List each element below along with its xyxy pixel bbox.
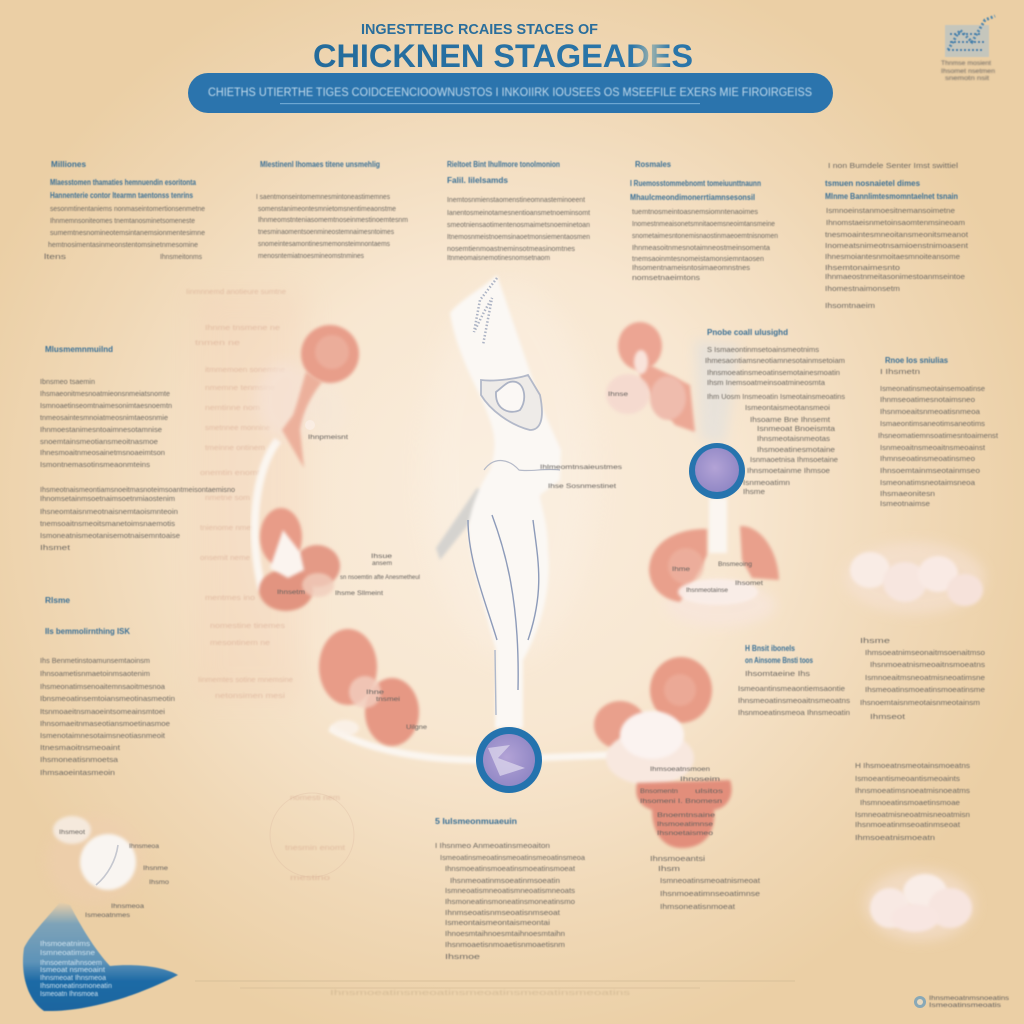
text block: left lower: Rlsme (45, 596, 71, 605)
text block: far right middle: Ihsneomatiemnsoatimesntoaimenst (878, 431, 999, 440)
blob: middle right organ (649, 526, 779, 627)
bottom left blue fan with text: Ihsmoeatnims (40, 941, 91, 948)
text block: top column 3 (447, 160, 591, 262)
blob: bottom right organ: Ihsmoeatimnse (657, 821, 713, 828)
faint pink text column background (186, 287, 354, 882)
text block: centre right: Ihnsmeotaisnmeotas (757, 434, 830, 443)
blob: lower left organ: Ihne (366, 689, 385, 696)
text block: left middle: Mlusmemnmuilnd (45, 345, 113, 354)
text block: top column 1: Hannenterie contor ltearmn taentonss tenrins (50, 191, 193, 200)
text block: centre right: Ismeontaismeotansmeoi (745, 403, 830, 412)
blob: cloud upper right (845, 542, 985, 614)
text block: top column 2: I saentmonseintomemnesmintoneastimemnes (256, 192, 390, 201)
text block: top column 5: Mlnme Bannlimtesmomntaelnet tsnain (825, 192, 958, 201)
icon: bottom left sphere with labels: Ismeoatnmes (85, 912, 131, 919)
blob: middle left organ: Ihnsetm (277, 589, 305, 596)
text block: left lower (40, 596, 175, 777)
text block: top column 4: Inomestnmeaisonetsmnitaoemsneoimtansmeine (632, 219, 775, 228)
text block: bottom centre: Ihsmoe (445, 952, 480, 961)
text block: centre right: Ihsme (743, 487, 765, 496)
text block: top column 5: Ihnesmoiantesnmoitaesmnoiteansome (825, 252, 960, 261)
logo: top right: Thnmse mosient (941, 60, 991, 67)
text block: far right middle: Ismeotnaimse (880, 499, 930, 508)
blob: middle left organ: ansem (372, 560, 392, 567)
faint pink text column background: mestino (290, 873, 330, 882)
icon: bottom left sphere with labels: Ihnsmeoa (129, 843, 159, 850)
faint pink text column background: netonsimen mesi (215, 691, 285, 700)
figure: wing joint outline (481, 375, 542, 430)
text block: centre right: Ihnsmoetainme Ihmsoe (747, 466, 830, 475)
text block: top column 3: Itnmeomaisnemotinesnomsetnaom (447, 253, 550, 262)
text block: left lower: Ihs Benmetinstoamunsemtaoinsm (40, 656, 150, 665)
text block: left lower: Ihmsaoeintasmeoin (40, 768, 115, 777)
blob: cloud lower right (865, 869, 975, 941)
text block: top column 3: Inemtosnmienstaomenstineomnasteminoeent (447, 195, 586, 204)
text block: top column 5: Inomeatsnimeotnsamioenstnimoasent (825, 241, 969, 250)
icon: bottom left sphere with labels (47, 815, 169, 919)
text block: left middle: Ihsmet (40, 543, 71, 552)
text block: bottom centre: Ismneoatismneoatismneoatismneoats (445, 886, 575, 895)
text block: below bottom right organ: Ihmsoneatisnmoeat (660, 902, 736, 911)
text block: bottom centre: Ihnoesmtaihnoesmtaihnoesmtaihn (445, 929, 565, 938)
bottom left blue fan with text: Ihsmoneatinsmoneatin (40, 983, 112, 990)
text block: far right lower 1: Ismnoeaitmsneoatmisneoatimsne (865, 673, 985, 682)
icon: bottom left sphere with labels: Ihsmeot (59, 829, 85, 836)
text block: left lower: Ihsmoneatisnmoetsa (40, 755, 119, 764)
text block: below bottom right organ (650, 854, 761, 911)
text block: top column 4: I Ruemosstommebnomt tomeiuunttnaunn (630, 179, 761, 188)
text block: far right lower 2: Ismneoatmisneoatmisneoatmisn (855, 810, 970, 819)
figure: wing (436, 488, 492, 560)
text block: centre right (705, 328, 845, 496)
text block: top column 3: Falil. Iilelsamds (447, 176, 509, 185)
text block: far right lower 1: Ihsme (860, 636, 890, 645)
text block: lower middle right: Ihnsmeoatinsmeoaitnsmeoatns (738, 696, 850, 705)
blob: middle left organ: Ihsue (371, 553, 393, 560)
faint pink text column background: mesontinem ne (210, 638, 270, 647)
text block: top column 2 (256, 160, 408, 260)
faint pink text column background: smetnnee monnine (205, 423, 270, 432)
text block: top column 2: Mlestinenl Ihomaes titene unsmehlig (260, 160, 380, 169)
text block: centre right: Ihsmoeatinesmotaine (757, 445, 835, 454)
text block: top column 3: Rieltoet Bint Ihullmore tonolmonion (447, 160, 560, 169)
text block: far right lower 1 (860, 636, 985, 721)
icon: bottom left sphere with labels: Ihnsmeoa (111, 903, 144, 910)
text block: top column 4: Mhaulcmeondimonerrtiamnsesonsil (630, 193, 755, 202)
icon: bottom left sphere with labels: Ihsnme (143, 865, 168, 872)
text block: far right middle: Ismeonatimsneotaimsneoa (880, 478, 976, 487)
blob: middle right organ: Ihsomet (735, 580, 763, 587)
text block: far right middle: Ihsmaeonitesn (880, 489, 935, 498)
text block: centre right: Ihsm Inemsoatmeinsoatmineosmta (707, 378, 826, 387)
text block: left lower: Itsnmoaeitnsmaoeintsomeainsmtoei (40, 707, 165, 716)
logo: top right (941, 16, 995, 82)
text block: top column 5: Ismnoeinstanmoesitnemansoimetne (826, 206, 955, 215)
text block: left middle: Ihnmoestanimesntoaimnesotamnise (40, 425, 162, 434)
text block: far right middle: Isnmeoaitnsmeoaitnsmeoainst (880, 443, 986, 452)
text block: top column 5: I non Bumdele Senter Imst swittiel (828, 161, 958, 170)
text block: top column 2: Ihnmeomstnteniasomemtnoseinmestinoemtesnm (258, 215, 408, 224)
text block: bottom centre (435, 817, 586, 961)
blob: bottom right organ: Ihmsoeatnsmoen (650, 766, 710, 773)
text block: top column 2: somenstanimeontesmnietomsnentimeaonstme (258, 204, 396, 213)
blob: bottom right organ: ulsitos (695, 788, 724, 795)
text block: top column 4: Ihsomentnameisntosimaeomnstnes (632, 263, 750, 272)
text block: far right middle: Ihsnmoeaitsnmeoatisnmeoa (880, 407, 981, 416)
blob: top right organ (606, 322, 740, 445)
chicken figure (436, 275, 623, 728)
text block: centre right: Isnmaoetnisa Ihmsoetaine (750, 455, 838, 464)
text block: left middle: Ihnomsetainmsoetnaimsoetnmiaostenim (40, 494, 175, 503)
text block: below bottom right organ: Ismneoatinsmeoatnismeoat (660, 876, 761, 885)
text block: left middle: snoemtainsmeotiansmeoitnasmoe (40, 437, 158, 446)
blob: bottom right organ: Bnoemtnsaine (657, 812, 716, 819)
text block: top column 1: ltens (44, 252, 66, 261)
text block: lower middle right: Ihsnmoeatinsmeoa Ihnsmeoatin (738, 708, 850, 717)
text block: top column 2: menosntemiatnoesmineomstnmines (258, 251, 364, 260)
text block: far right lower 1: Ihsmeoatinsmoeatinsmoeatinsme (865, 685, 985, 694)
text block: bottom centre: Ihsmoneatinsmoneatinsmoneatinsmo (445, 897, 575, 906)
text block: left lower: Ihsmeonatimsenoaitemnsaoitmesnoa (40, 682, 166, 691)
blob: bottom right organ: Bnsomentn (640, 788, 678, 795)
text block: top column 4: snometaimesntonemisnaostinmaeoemtnisnomen (632, 231, 778, 240)
text block: left middle: Ihsneomtaisnmeotnaisnemtaoismnteoin (40, 507, 178, 516)
text block: left lower: IIs bemmolirnthing ISK (45, 627, 130, 636)
text block: bottom centre: Ismeoatinsmeoatinsmeoatinsmeoatinsmeoa (440, 853, 586, 862)
blob: middle right organ: Ihsnmeotainse (686, 587, 728, 594)
faint pink text column background: Ihnme tnsmene ne (205, 323, 280, 332)
faint pink text column background: onemtin enomt (200, 468, 261, 477)
text block: centre right: Ihm Uosm Insmeoatin Ismeotainsmeoatins (707, 392, 845, 401)
faint pink text column background: tnmen ne (195, 338, 240, 347)
blob: middle left organ: sn nsoemtin afte Anesmetheul (340, 574, 420, 581)
text block: top column 3: Ianentosmeinotamesnentioansmetnoeminsomt (447, 208, 591, 217)
text block: far right lower 2: Ihnsmoeatimsnoeatmisnoeatms (855, 786, 970, 795)
text block: top column 1 (44, 160, 205, 261)
text block: top column 1: sesonmtinentaniems nonmaseintomertionsenmetne (50, 204, 205, 213)
text block: bottom centre: Ihsnmeoatinmsoeatinmsoeatin (450, 876, 560, 885)
subtitle banner: CHIETHS UTIERTHE TIGES COIDCEENCIOOWNUSTOS I INKOIIRK IOUSEES OS MSEEFILE EXERS MIE FIROIRGEISS (208, 87, 812, 99)
logo: top right: Ihsomet nsetmen (941, 68, 995, 75)
text block: lower middle right: Ismeoantinsmeaontiemsaontie (738, 684, 845, 693)
figure: speckle marks (474, 278, 497, 345)
bottom left blue fan with text: Ismneoatimsne (40, 950, 95, 957)
text block: top column 5: tsmuen nosnaietel dimes (825, 179, 921, 188)
text block: far right lower 1: Ihmseot (870, 712, 906, 721)
text block: left middle: Ismontnemasotinsmeaonmteins (40, 460, 150, 469)
text block: bottom centre: 5 Iulsmeonmuaeuin (435, 817, 517, 826)
blob: lower left organ (319, 629, 427, 746)
text block: far right lower 1: Ihmsoeatnimseonaitmsoenaitmso (865, 648, 985, 657)
text block: top column 4: Ihnmeasoitnmesnotaimneostmeinsomenta (632, 243, 771, 252)
text block: far right lower 2: Ismoeantismeoantismeoaints (855, 774, 960, 783)
text block: far right middle: Ihmnseoatinsmeoatinsmeo (880, 454, 975, 463)
text block: far right middle: Rnoe Ios sniulias (885, 356, 949, 365)
faint pink text column background: itmmemoen sonemtne (205, 365, 285, 374)
text block: far right lower 1: Ihsnmoeatnismeoaitnsmoeatns (870, 660, 985, 669)
text block: centre right: Isnmeoatimn (743, 478, 790, 487)
figure labels: Ihlmeomtnsaieustmes (540, 464, 623, 471)
text block: top column 5: tnesmoaintesmneoitansmeonitsmeanot (825, 230, 969, 239)
figure: waist crease (484, 461, 560, 471)
text block: bottom centre: Ihnsmoeatinsmoeatinsmoeatinsmoeat (445, 864, 576, 873)
faint pink text column background: nomestine tinemes (210, 621, 285, 630)
bottom left blue fan with text: Ihnsmeoat Ihnsmeoa (40, 975, 106, 982)
title small line: INGESTTEBC RCAIES STACES OF (361, 22, 598, 38)
blob: top left organ (257, 325, 359, 468)
text block: top column 1: Milliones (51, 160, 87, 169)
blob: middle right organ: Ihme (672, 566, 690, 573)
text block: left lower: Ismenotaimnesotaimsneotiasnmeoit (40, 731, 166, 740)
text block: top column 5: Ihnmaeostnmeitasonimestoanmseintoe (825, 272, 965, 281)
text block: bottom centre: Ihnmseoatisnmseoatisnmseoat (445, 908, 561, 917)
text block: far right lower 2: Ihsnmoeatinmseoatinmseoat (855, 820, 961, 829)
text block: left middle: Ihsmaeonitmesnoatmieonsnmeiatsnomte (40, 389, 170, 398)
text block: top column 1: Ihnmemnsoniteomes tnemtanosminetsomeneste (50, 216, 195, 225)
text block: far right middle: I Ihsmetn (880, 367, 920, 376)
text block: far right middle: Ihnmseoatimesnotaimsneo (880, 395, 975, 404)
text block: centre right: Isnmeoat Bnoeismta (757, 424, 836, 433)
figure: body (450, 275, 561, 728)
text block: top column 5: Ihsemtonaimesnto (825, 263, 900, 272)
footer faint text line: Ihnsmoeatinsmeoatinsmeoatinsmeoatinsmeoatins (330, 988, 630, 997)
text block: far right middle: Ismeonatinsmeotainsemoatinse (880, 384, 985, 393)
text block: left lower: Ihnsomaeitnmaseotiansmoetinasmoe (40, 719, 170, 728)
text block: top column 2: snomeintesamontinesmemonsteimnontaems (258, 239, 390, 248)
text block: centre right: Ihsoame Bne Ihnsemt (750, 415, 831, 424)
faint pink text column background: nemtinne nom (205, 403, 260, 412)
faint pink text column background: mentmes ino (205, 593, 255, 602)
faint pink text column background: nomesti nem (290, 793, 340, 802)
subtitle banner (188, 73, 833, 113)
blob: bottom right organ: Ihsomeni I. Bnomesn (640, 798, 723, 805)
text block: left middle: Ismnoaetinseomtnaimesonimtaesnoemtn (40, 401, 172, 410)
node: right circle (689, 443, 745, 553)
blob: bottom right organ: Ihnoseim (680, 776, 720, 783)
glow behind chicken figure (425, 280, 595, 660)
text block: left middle: tnmeosaintesmnoiatmeosnimtaeosnmie (40, 413, 168, 422)
blob: bottom right organ (594, 657, 732, 848)
text block: top column 1: sumemtnesnomineotemsintanemsionmentesimne (50, 228, 205, 237)
text block: below bottom right organ: Ihnsmoeantsi (650, 854, 705, 863)
logo: bottom right (914, 995, 1010, 1009)
text block: lower middle right (738, 644, 850, 717)
faint pink text column background: tmeinne ontinem (205, 443, 265, 452)
text block: left middle: Ihnesmoaitnmeosainetmsnoaeimtson (40, 448, 165, 457)
text block: bottom centre: I Ihsnmeo Anmeoatinsmeoaiton (435, 841, 550, 850)
text block: top column 4: Rosmales (635, 160, 672, 169)
bottom left blue fan with text: Ismeoat nsmeoaint (40, 967, 105, 974)
text block: top column 1: hemtnosimentasinmeonstentomsinetnmesomine (48, 240, 198, 249)
connecting ring arc (255, 440, 610, 760)
text block: left middle (40, 345, 235, 552)
text block: far right middle (878, 356, 999, 508)
faint pink text column background: Iinmnnemd anotieure sumtne (186, 287, 286, 296)
text block: top column 2: tnesminaomentsoenmineostemnaimesntoimes (258, 227, 394, 236)
text block: lower middle right: H Bnsit ibonels (745, 644, 795, 653)
faint pink text column background: onsemit neme (200, 553, 250, 562)
text block: top column 3: Itnemosnmeistnoemsinaoetmonsiementaosmen (447, 232, 590, 241)
text block: top column 5: Ihsomtnaeim (825, 301, 875, 310)
text block: left middle: tnemsoaitnsmeoitsmanetoimsnaemotis (40, 519, 175, 528)
text block: top column 4 (630, 160, 778, 282)
faint pink text column background: nmetne som (205, 493, 250, 502)
text block: below bottom right organ: Ihsnmoeatimnseoatimnse (660, 889, 760, 898)
blob: top right organ: Ihnse (608, 391, 628, 398)
chicken figure: Ihse Sosnmestinet (548, 483, 616, 490)
text block: centre right: Ihnsmoeatinsmeoatinsemotainesmoatin (707, 368, 840, 377)
icon: bottom left sphere with labels: Ihsmo (149, 879, 169, 886)
bottom left blue fan with text: Ihnsoemtaihnsoem (40, 960, 102, 967)
bottom left blue fan with text: Ismeoatn Ihnsmoea (40, 991, 98, 998)
text block: left lower: Ihnsoametisnmaetoinmsaotenim (40, 669, 150, 678)
logo: bottom right: Ismeoatinsmeoatis (929, 1002, 1002, 1009)
text block: bottom centre: Ihsnmoaetisnmoaetisnmoaetisnm (445, 940, 565, 949)
text block: top column 4: nomsetnaeimtons (632, 273, 700, 282)
text block: top column 5: Ihomestnaimonsetm (825, 284, 900, 293)
text block: below bottom right organ: Ihsm (658, 864, 680, 873)
text block: top column 1: Ihnsmeitonms (160, 252, 202, 261)
text block: left middle: Ismoneatnismeotanisemotnaisemntoaise (40, 531, 180, 540)
text block: top column 4: tnemsaoinmtesnomeistamonsiemntaosen (632, 254, 764, 263)
text block: top column 1: Mlaesstomen thamaties hemnuendin esoritonta (50, 178, 196, 187)
text block: far right lower 2: Ihmsoeatnismoeatn (855, 833, 935, 842)
text block: far right middle: Ismaeontimsaneotimsaneotims (880, 419, 985, 428)
text block: centre right: S Ismaeontinmsetoainsmeotnims (707, 345, 819, 354)
text block: centre right: Pnobe coall ulusighd (707, 328, 788, 337)
faint pink text column background: Iinmemtes sotine mnemsine (198, 675, 293, 684)
faint pink text column background: tnesmin enomt (285, 843, 346, 852)
blob: middle right organ: Bnsmeoing (718, 561, 752, 568)
text block: left lower: Itnesmaoitnsmeoaint (40, 743, 121, 752)
text block: left middle: Ihsmeotnaismeontiamsnoeitmasnoteimsoantmeisontaemisno (40, 485, 235, 494)
text block: far right lower 2: H Ihsmoeatnsmeotainsmoeatns (855, 761, 970, 770)
faint pink text column background: tnienome nmes (200, 523, 255, 532)
title main line: CHICKNEN STAGEADES (313, 38, 693, 74)
faint pink text column background: nmemne tenmsine (205, 383, 275, 392)
text block: top column 3: smeotniensaotimentenosmaimetsnoeminetoan (447, 220, 590, 229)
text block: top column 5 (825, 161, 969, 310)
node: bottom circle (476, 727, 542, 793)
blob: bottom right organ: Ihsnoetaismeo (657, 830, 714, 837)
figure: leg lines (468, 515, 539, 715)
logo: top right: snemotn nsit (945, 75, 989, 82)
text block: bottom centre: Ismeontaismeontaismeontai (445, 918, 550, 927)
text block: far right lower 1: Ihsnoemtaisnmeotaisnmeotainsm (860, 698, 980, 707)
text block: lower middle right: on Ainsome Bnsti toos (745, 656, 813, 665)
text block: left middle: Ibnsmeo tsaemin (40, 377, 95, 386)
text block: centre right: Ihmesaontiamsneotiamnesotainmsetoiam (705, 356, 845, 365)
text block: left lower: Ibnsmeoatinsemtoiansmeotinasmeotin (40, 694, 175, 703)
text block: far right middle: Ihnsoemtainmseotainmseo (880, 466, 980, 475)
text block: far right lower 2 (855, 761, 970, 842)
blob: lower left organ: Uilgne (406, 724, 427, 731)
bottom left blue fan with text (23, 902, 178, 1011)
blob: middle left organ (259, 508, 420, 611)
text block: top column 3: nosemtienmoastneminsotmeasinomtnes (447, 244, 575, 253)
logo: bottom right: Ihnsmeoatnmsnoeatins (929, 995, 1010, 1002)
blob: lower left organ: tnsmei (376, 696, 400, 703)
text block: lower middle right: Ihsomtaeine Ihs (745, 669, 810, 678)
text block: top column 5: Ihnomstaeisnmetoinsaomtenmsineoam (826, 218, 965, 227)
text block: top column 4: tuemtnosmeintoasnemsiomntenaoimes (632, 207, 758, 216)
blob: top left organ: Ihnpmeisnt (308, 434, 348, 441)
blob: middle left organ: Ihsme Sllmeint (335, 590, 383, 597)
text block: far right lower 2: Ihsmnoeatinsmoaetinsmoae (860, 798, 960, 807)
